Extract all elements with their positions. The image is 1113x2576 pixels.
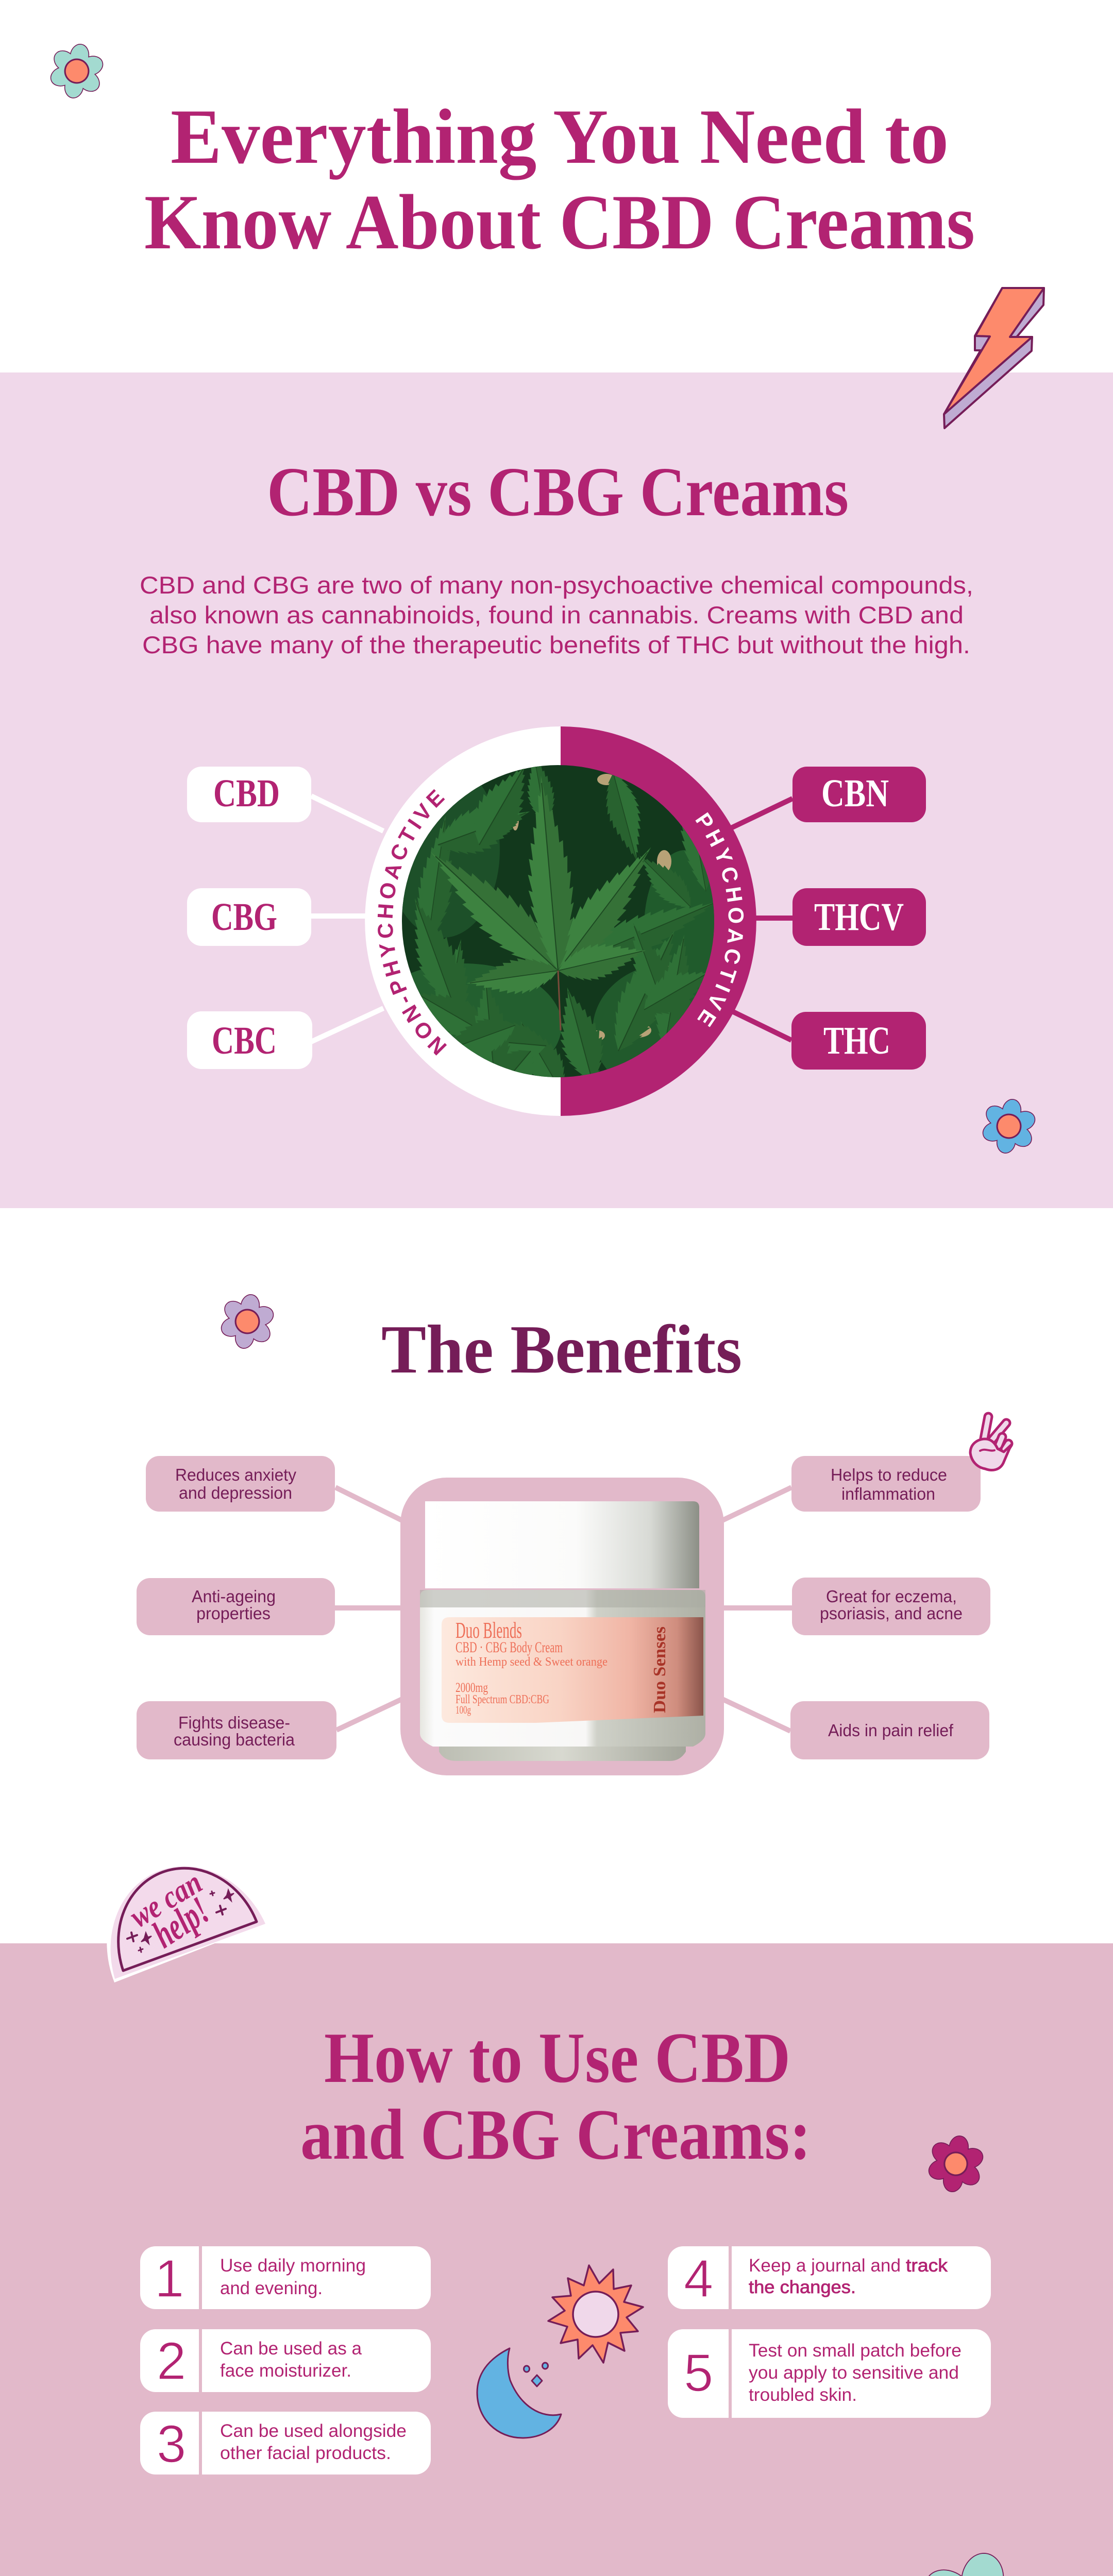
benefit: inflammation: Helps to reduce xyxy=(831,1465,947,1484)
title: Everything You Need to xyxy=(171,93,949,180)
jar label: 100g xyxy=(456,1703,471,1716)
benefit: reduces anxiety: Reduces anxiety xyxy=(175,1465,296,1484)
benefit: eczema: psoriasis, and acne xyxy=(820,1604,963,1623)
step 5 xyxy=(668,2329,991,2418)
pill: CBC: CBC xyxy=(212,1019,277,1062)
text block: intro paragraph: CBG have many of the therapeutic benefits of THC but without the high. xyxy=(142,631,970,658)
step 2: face moisturizer. xyxy=(220,2361,351,2381)
step 5: troubled skin. xyxy=(749,2385,857,2405)
jar base xyxy=(439,1740,686,1761)
title: Know About CBD Creams xyxy=(144,179,975,265)
text block: intro paragraph: also known as cannabinoids, found in cannabis. Creams with CBD and xyxy=(149,601,964,629)
benefit: anti-ageing xyxy=(137,1578,335,1635)
step 3: Can be used alongside xyxy=(220,2421,407,2441)
jar label: CBD · CBG Body Cream xyxy=(456,1639,563,1656)
pill: CBG: CBG xyxy=(211,895,277,939)
sticker: we can help: help! xyxy=(145,1889,217,1956)
step 2: Can be used as a xyxy=(220,2338,362,2359)
pill: CBD xyxy=(187,767,311,822)
step 1: Use daily morning xyxy=(220,2256,366,2276)
step 4: the changes. xyxy=(749,2277,856,2297)
step 4 xyxy=(668,2246,991,2309)
step 3: other facial products. xyxy=(220,2443,391,2463)
benefit: anti-ageing: properties xyxy=(196,1604,271,1623)
sticker: we can help xyxy=(107,1859,266,1982)
step 4: track xyxy=(906,2256,948,2276)
icon: smiley flower xyxy=(906,2545,1049,2576)
image: cannabis leaf xyxy=(402,765,714,1077)
benefit: pain relief xyxy=(790,1701,989,1759)
ring label: non-psychoactive: NON-PHYCHOACTIVE xyxy=(377,789,447,1056)
benefit: inflammation: inflammation xyxy=(841,1484,935,1503)
pill: CBN xyxy=(792,767,926,822)
pill: THC xyxy=(791,1012,926,1070)
diagram: split ring xyxy=(365,726,756,1116)
sticker: we can help: we can xyxy=(124,1865,208,1935)
step 1 xyxy=(140,2246,431,2309)
jar label: 2000mg xyxy=(456,1680,488,1695)
benefit: pain relief: Aids in pain relief xyxy=(828,1721,954,1740)
benefit: fights bacteria: causing bacteria xyxy=(174,1730,295,1749)
jar body xyxy=(420,1590,705,1747)
step 1: 1 xyxy=(155,2249,184,2308)
benefit: reduces anxiety: and depression xyxy=(179,1483,292,1502)
jar cap xyxy=(425,1501,699,1588)
jar label: Duo Senses xyxy=(650,1626,669,1713)
step 2 xyxy=(140,2329,431,2392)
jar label: Full Spectrum CBD:CBG xyxy=(456,1693,549,1706)
text block: intro paragraph xyxy=(140,571,973,658)
jar label: with Hemp seed & Sweet orange xyxy=(456,1655,608,1669)
icon: teal flower top left xyxy=(45,40,109,103)
icon: blue flower xyxy=(977,1095,1041,1158)
icon: moon and stars xyxy=(477,2348,561,2438)
icon: peace hand xyxy=(970,1417,1011,1470)
step 5: 5 xyxy=(684,2343,713,2402)
heading: The Benefits: The Benefits xyxy=(381,1311,742,1387)
pill: CBC xyxy=(187,1011,312,1069)
jar label xyxy=(442,1617,703,1723)
text block: intro paragraph: CBD and CBG are two of many non-psychoactive chemical compounds, xyxy=(140,571,973,599)
tan highlights xyxy=(512,774,671,1041)
step 2: 2 xyxy=(157,2331,186,2391)
jar label: Duo Blends xyxy=(456,1618,522,1643)
pill: THCV: THCV xyxy=(814,895,904,939)
benefit: eczema xyxy=(792,1578,990,1635)
step 1: and evening. xyxy=(220,2278,323,2298)
step 5: Test on small patch before xyxy=(749,2341,962,2361)
step 3 xyxy=(140,2412,431,2475)
benefit: reduces anxiety xyxy=(146,1456,335,1512)
background leaflets xyxy=(396,751,727,1125)
icon: purple flower xyxy=(215,1290,279,1353)
diagram: cannabinoid connectors xyxy=(311,796,792,1042)
heading: How to Use CBD and CBG Creams xyxy=(300,2018,811,2175)
benefit connectors xyxy=(335,1487,792,1731)
benefit: eczema: Great for eczema, xyxy=(826,1587,957,1606)
heading: How to Use CBD and CBG Creams: How to Use CBD xyxy=(324,2018,790,2098)
benefit: fights bacteria xyxy=(137,1701,336,1759)
ring label: psychoactive: PHYCHOACTIVE xyxy=(696,812,744,1027)
benefit: anti-ageing: Anti-ageing xyxy=(192,1587,276,1606)
main leaf xyxy=(431,776,651,994)
heading: CBD vs CBG Creams: CBD vs CBG Creams xyxy=(267,453,849,531)
icon: magenta flower xyxy=(923,2131,989,2196)
pill: CBD: CBD xyxy=(213,772,280,815)
icon: lightning bolt xyxy=(944,288,1044,428)
icon: sun xyxy=(548,2265,643,2363)
step 5: you apply to sensitive and xyxy=(749,2363,959,2383)
benefit: inflammation xyxy=(791,1456,981,1512)
step 4: Keep a journal and xyxy=(749,2256,901,2276)
title xyxy=(144,93,975,265)
pill: THC: THC xyxy=(823,1019,890,1062)
benefit: fights bacteria: Fights disease- xyxy=(178,1713,290,1732)
pill: CBN: CBN xyxy=(821,772,889,815)
pill: CBG xyxy=(187,888,311,946)
heading: How to Use CBD and CBG Creams: and CBG Creams: xyxy=(300,2095,811,2175)
step 3: 3 xyxy=(157,2414,186,2473)
pill: THCV xyxy=(792,888,926,946)
step 4: 4 xyxy=(684,2249,713,2308)
panel: product jar xyxy=(400,1478,724,1775)
